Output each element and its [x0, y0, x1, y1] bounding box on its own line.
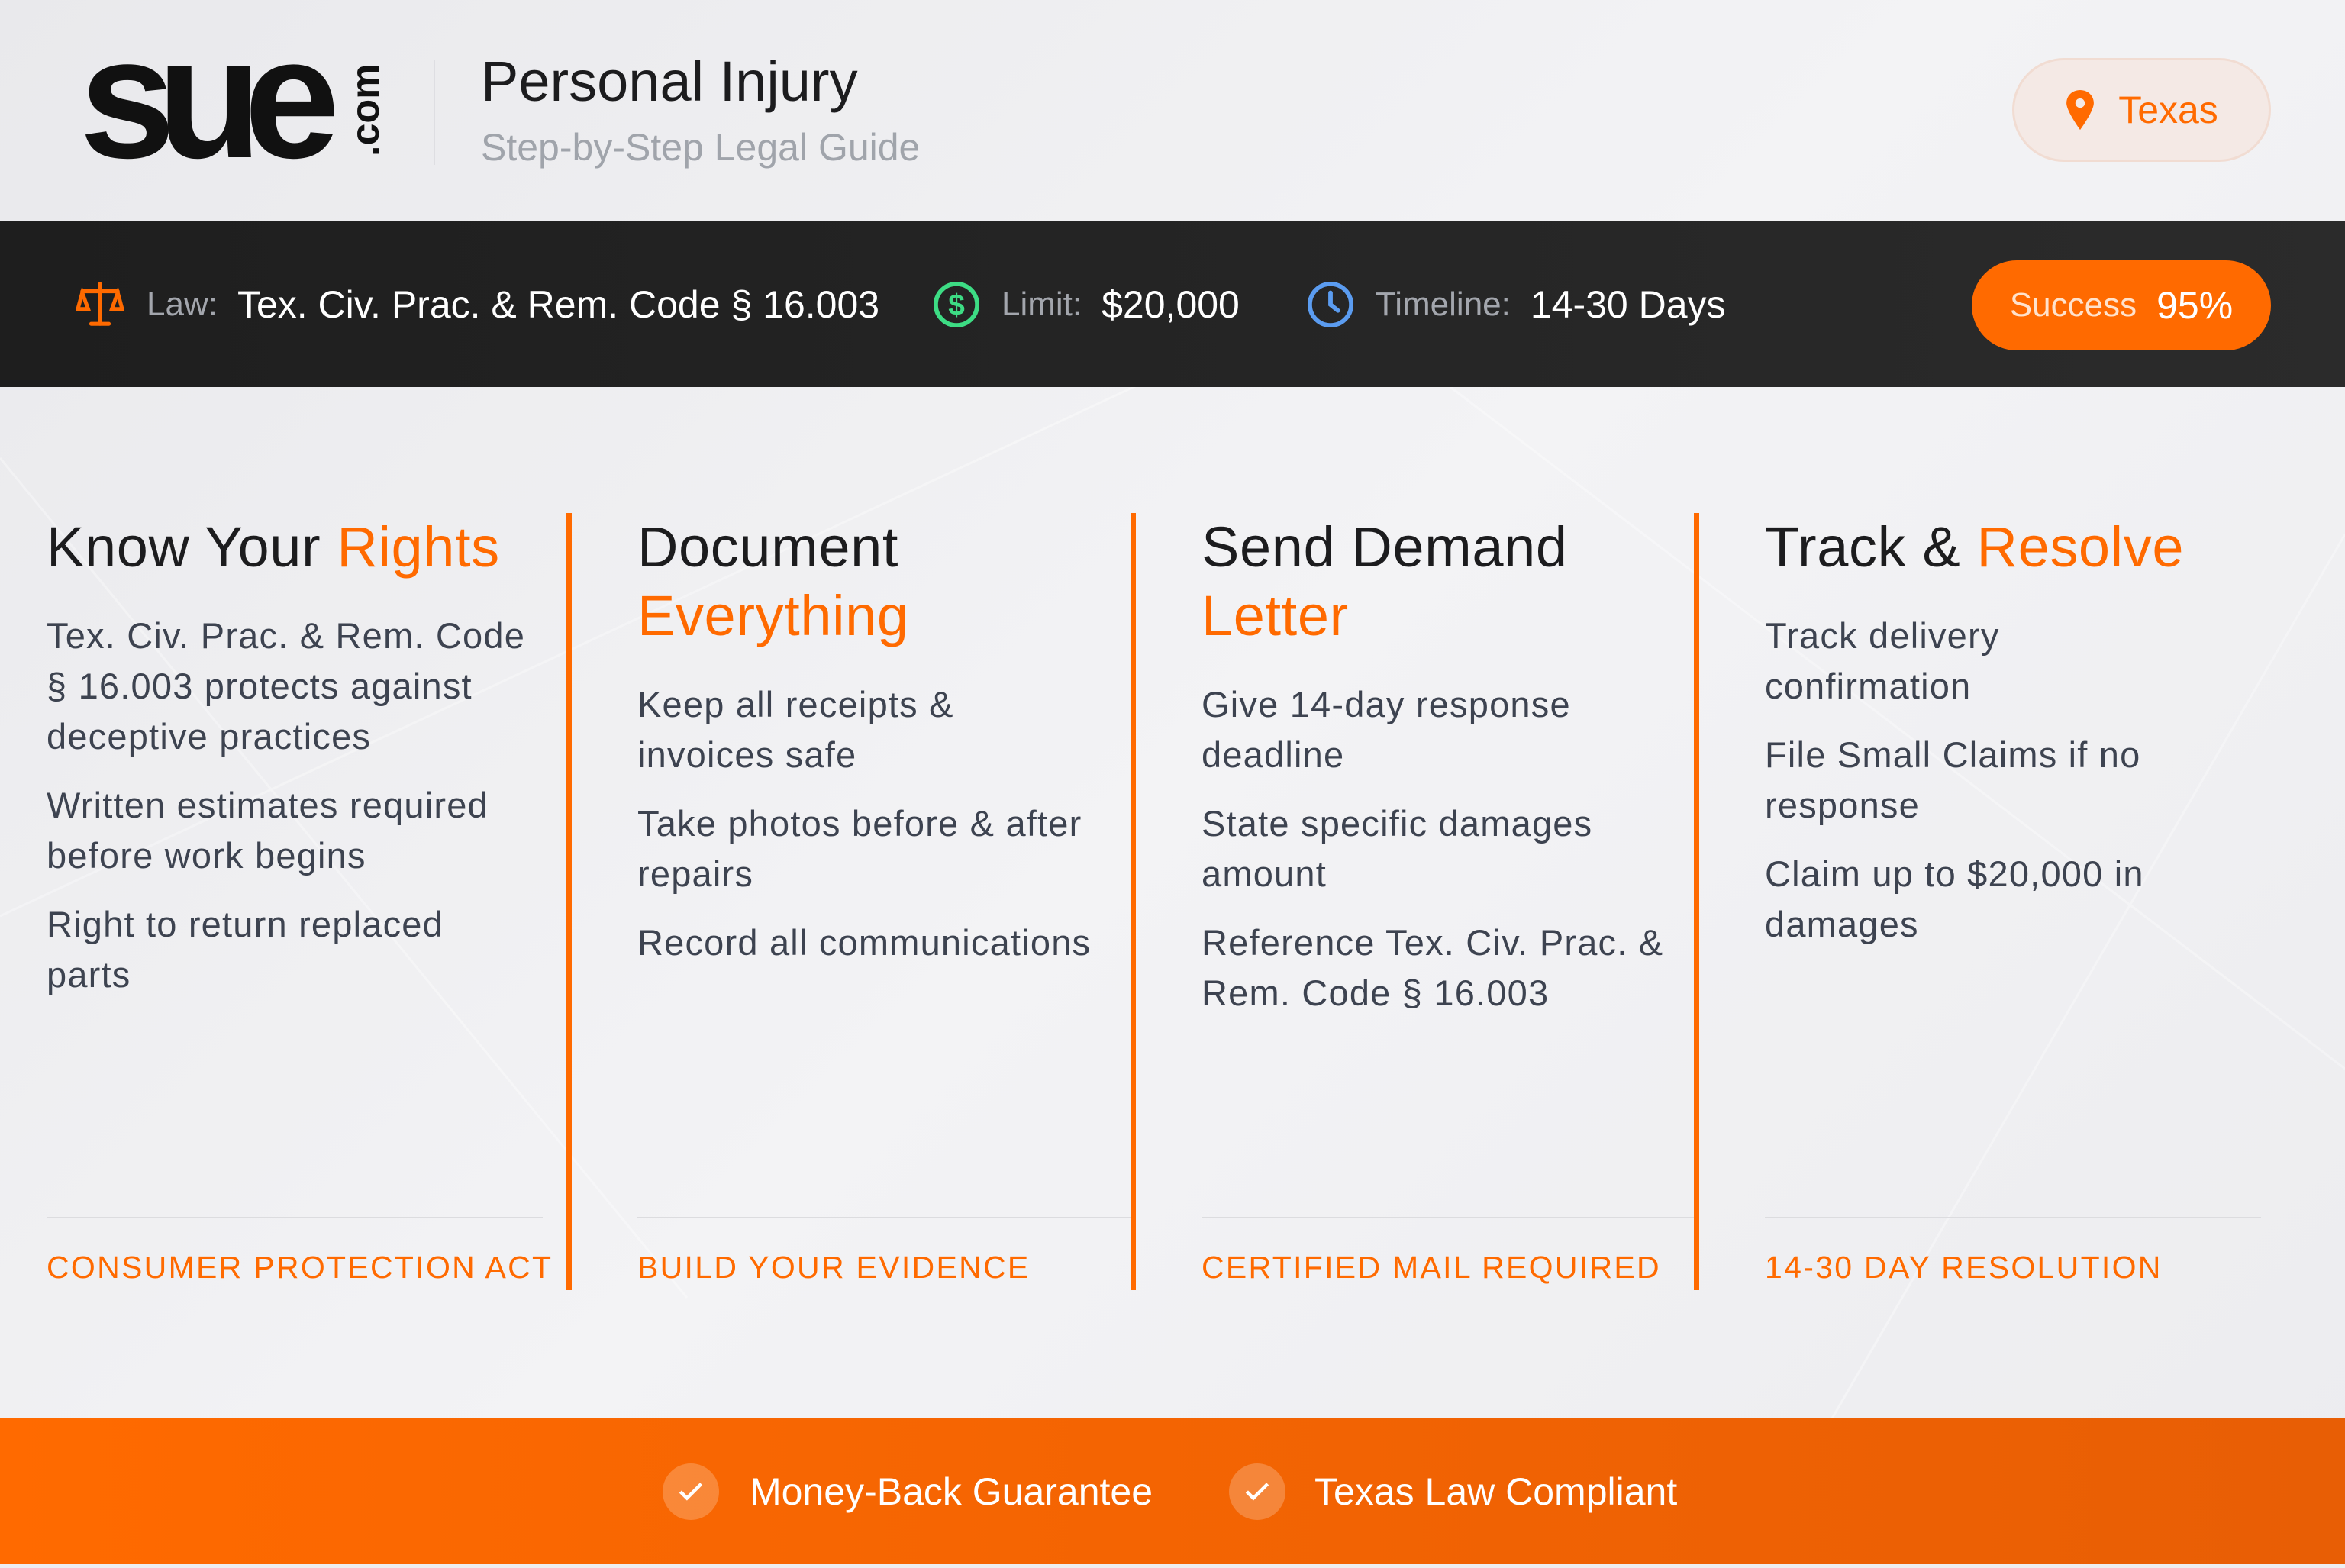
subtitle: Step-by-Step Legal Guide — [481, 126, 920, 169]
bullets: repairs — [637, 853, 753, 894]
location pill: Texas — [2012, 58, 2271, 162]
heading: Track & Resolve — [1765, 515, 2184, 579]
label: certified mail: CERTIFIED MAIL REQUIRED — [1202, 1250, 1661, 1285]
label: consumer protection: CONSUMER PROTECTION ACT — [47, 1250, 553, 1285]
heading — [1202, 515, 1568, 647]
bullets — [637, 684, 1091, 963]
bullets — [1202, 684, 1663, 1013]
success pill: 95% — [2156, 284, 2233, 327]
timeline item — [1308, 282, 1726, 327]
heading: Send Demand — [1202, 515, 1568, 579]
bullets: Keep all receipts & — [637, 684, 954, 724]
bullets: Written estimates required — [47, 785, 489, 825]
badge: compliant: Texas Law Compliant — [1314, 1470, 1677, 1513]
bullets — [47, 615, 525, 995]
bullets: Reference Tex. Civ. Prac. & — [1202, 922, 1663, 963]
title: Personal Injury — [481, 50, 858, 113]
timeline item: Timeline: — [1376, 286, 1511, 323]
icon: dollar — [934, 282, 979, 327]
icon: dollar: $ — [948, 289, 965, 322]
divider: header — [434, 60, 435, 165]
icon: clock — [1308, 282, 1353, 327]
bullets — [1765, 615, 2144, 944]
logo: sue — [79, 1, 321, 194]
bullets: Tex. Civ. Prac. & Rem. Code — [47, 615, 525, 656]
heading — [637, 515, 909, 647]
panel: know your rights — [47, 515, 525, 995]
logo: .com — [344, 64, 388, 156]
bullets: invoices safe — [637, 734, 856, 775]
limit item — [934, 282, 1240, 327]
bullets: § 16.003 protects against — [47, 666, 473, 706]
bullets: Give 14-day response — [1202, 684, 1571, 724]
panel: track & resolve — [1765, 515, 2184, 944]
bullets: parts — [47, 954, 131, 995]
bullets: File Small Claims if no — [1765, 734, 2140, 775]
law item: Law: — [147, 286, 218, 323]
location pill: Texas: Texas — [2118, 89, 2218, 131]
icon: pin — [2066, 90, 2094, 130]
heading: Document — [637, 515, 898, 579]
bullets: Record all communications — [637, 922, 1091, 963]
success pill — [1972, 260, 2271, 350]
limit item: Limit: — [1002, 286, 1082, 323]
bullets: deadline — [1202, 734, 1344, 775]
heading: Letter — [1202, 584, 1349, 647]
badge: money-back — [663, 1463, 1153, 1520]
bullets: response — [1765, 785, 1920, 825]
heading: Know Your Rights — [47, 515, 500, 579]
panel: send demand letter — [1202, 515, 1663, 1013]
bullets: amount — [1202, 853, 1327, 894]
bullets: Take photos before & after — [637, 803, 1082, 844]
success pill: Success — [2010, 286, 2137, 324]
bullets: before work begins — [47, 835, 366, 876]
footer band — [0, 1418, 2345, 1564]
badge: compliant — [1229, 1463, 1677, 1520]
bullets: damages — [1765, 904, 1919, 944]
label: resolution: 14-30 DAY RESOLUTION — [1765, 1250, 2163, 1285]
heading: Everything — [637, 584, 909, 647]
law item: Tex. Civ. Prac. & Rem. Code § 16.003 — [237, 283, 879, 326]
badge: money-back: Money-Back Guarantee — [750, 1470, 1153, 1513]
bullets: Right to return replaced — [47, 904, 444, 944]
bullets: confirmation — [1765, 666, 1971, 706]
bullets: State specific damages — [1202, 803, 1592, 844]
bullets: Rem. Code § 16.003 — [1202, 973, 1549, 1013]
bullets: deceptive practices — [47, 716, 371, 757]
limit item: $20,000 — [1102, 283, 1240, 326]
label: build evidence: BUILD YOUR EVIDENCE — [637, 1250, 1031, 1285]
bullets: Track delivery — [1765, 615, 2000, 656]
timeline item: 14-30 Days — [1531, 283, 1726, 326]
icon: scales — [76, 282, 124, 326]
bullets: Claim up to $20,000 in — [1765, 853, 2144, 894]
info bar — [0, 221, 2345, 387]
panel: document everything — [637, 515, 1091, 963]
